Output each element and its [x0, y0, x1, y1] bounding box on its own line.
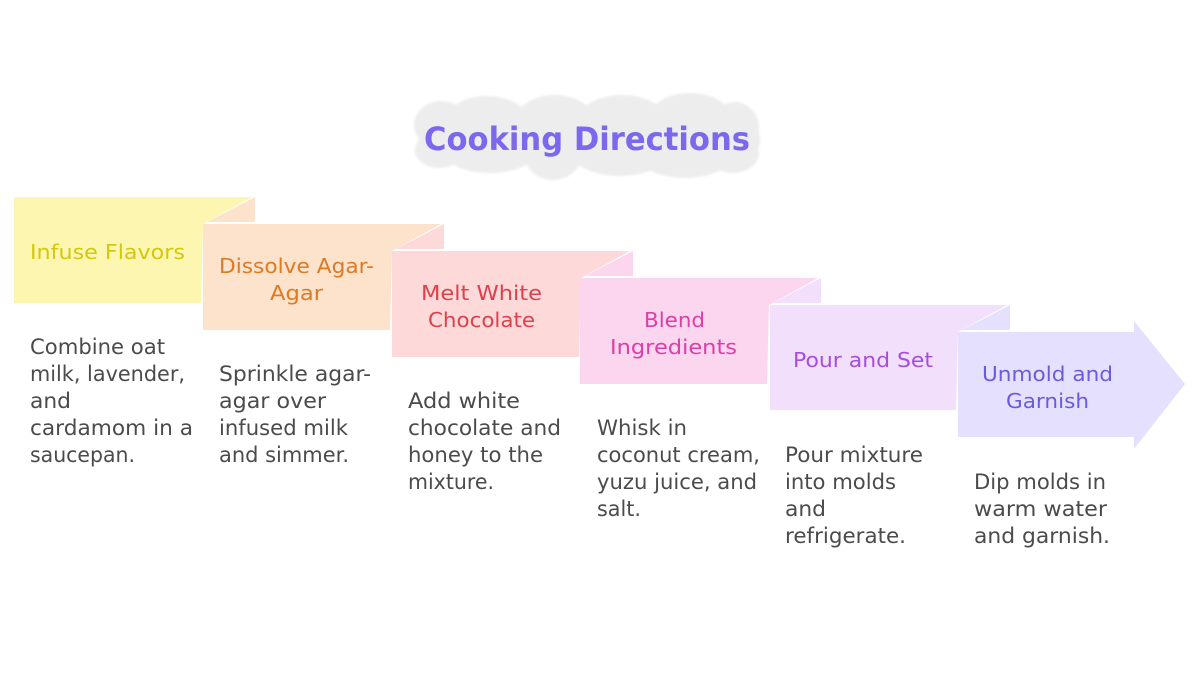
step 5 label: Pour and Set	[793, 348, 933, 372]
description: step 1: Combine oat	[30, 335, 165, 359]
step 1 label: Infuse Flavors	[30, 240, 185, 264]
description: step 1: cardamom in a	[30, 416, 193, 440]
step 2 flap on step 1	[207, 197, 255, 222]
title text: Cooking Directions	[424, 120, 750, 158]
step 3 label: Melt White	[421, 281, 542, 305]
step 2 label: Dissolve Agar-	[219, 254, 374, 278]
step 5 flap on step 4	[773, 278, 821, 303]
description: step 3: mixture.	[408, 470, 494, 494]
step 6 flap on step 5	[962, 305, 1010, 330]
step 5: Pour and Set	[770, 305, 1007, 410]
step 6 arrow	[958, 321, 1185, 449]
step 3 banner	[392, 251, 630, 357]
description: step 5: refrigerate.	[785, 524, 906, 548]
description: step 5: into molds	[785, 470, 896, 494]
step 3 label: Chocolate	[428, 308, 535, 332]
description: step 2: infused milk	[219, 416, 349, 440]
description: step 4: coconut cream,	[597, 443, 760, 467]
description: step 4: Whisk in	[597, 416, 687, 440]
step 2 label: Agar	[270, 281, 324, 305]
step 4 label: Ingredients	[610, 335, 737, 359]
description: step 3: honey to the	[408, 443, 543, 467]
step 4 label: Blend	[644, 308, 705, 332]
step 6: Unmold and Garnish arrow	[958, 321, 1185, 449]
description: step 4: salt.	[597, 497, 641, 521]
step 2: Dissolve Agar-Agar	[203, 224, 441, 330]
step 6 label: Garnish	[1006, 389, 1089, 413]
description: step 1: and	[30, 389, 71, 413]
description: step 6: warm water	[974, 497, 1107, 521]
description: step 1: saucepan.	[30, 443, 135, 467]
description: step 3: Add white	[408, 389, 520, 413]
description: step 2: agar over	[219, 389, 326, 413]
description: step 3: chocolate and	[408, 416, 561, 440]
title cloud background	[414, 93, 760, 180]
step 4 banner	[580, 278, 818, 384]
description: step 4: yuzu juice, and	[597, 470, 757, 494]
step 2 banner	[203, 224, 441, 330]
step 6 label: Unmold and	[982, 362, 1113, 386]
step 4 flap on step 3	[585, 251, 633, 276]
step 1: Infuse Flavors	[14, 197, 252, 303]
description: step 2: Sprinkle agar-	[219, 362, 371, 386]
description: step 5: and	[785, 497, 826, 521]
step 3: Melt White Chocolate	[392, 251, 630, 357]
step 4: Blend Ingredients	[580, 278, 818, 384]
description: step 2: and simmer.	[219, 443, 349, 467]
description: step 6: Dip molds in	[974, 470, 1106, 494]
description: step 6: and garnish.	[974, 524, 1110, 548]
step 5 banner	[770, 305, 1007, 410]
step 3 flap on step 2	[396, 224, 444, 249]
description: step 1: milk, lavender,	[30, 362, 185, 386]
title	[414, 93, 760, 180]
description: step 5: Pour mixture	[785, 443, 923, 467]
step 1 banner	[14, 197, 252, 303]
